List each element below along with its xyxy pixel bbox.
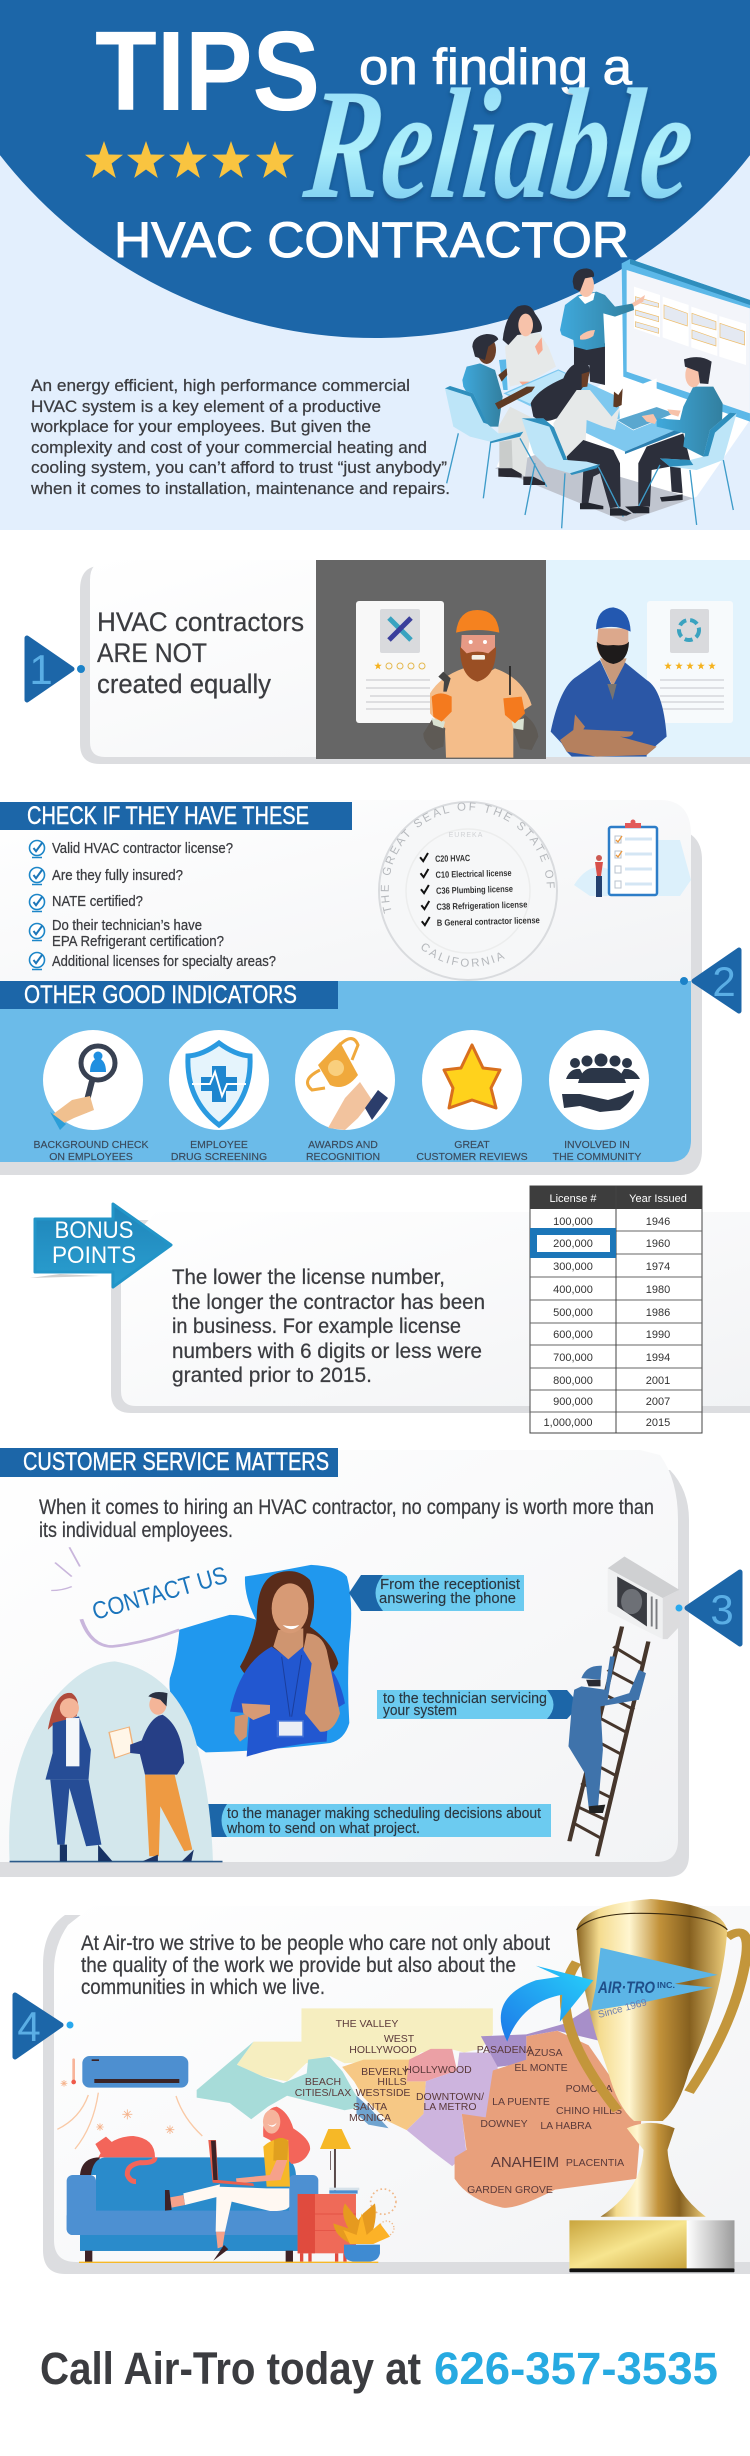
table: license number by year issued: 2007 [646,1396,670,1408]
intro paragraph: complexity and cost of your commercial heating and [31,438,427,457]
dark photo panel: poor contractor [316,560,546,759]
badge 1: 1 [29,646,53,693]
table: license number by year issued: 1974 [646,1261,670,1273]
checklist [30,840,276,970]
service area map: BEVERLY [361,2066,409,2078]
intro paragraph: workplace for your employees. But given the [30,417,371,436]
trophy with Air-Tro logo: AIR·TRO [597,1978,655,1997]
table: license number by year issued: 800,000 [553,1375,593,1387]
arrow: bonus points [30,1204,171,1287]
indicator: customer reviews: CUSTOMER REVIEWS [416,1151,528,1163]
illustration: manager and colleague [9,1661,223,1862]
table: license number by year issued: License # [549,1193,597,1205]
call to action [40,2343,718,2394]
table: license number by year issued: 300,000 [553,1261,593,1273]
panel 2: credentials and indicators [0,801,702,1175]
illustration: woman relaxing on couch under AC [57,2056,396,2262]
table: license number by year issued: 1,000,000 [544,1417,592,1429]
icon: clipboard with person [574,820,691,897]
checklist: Valid HVAC contractor license? [52,841,233,857]
heading: check if they have these: CHECK IF THEY HAVE THESE [27,802,309,830]
heading: customer service matters: CUSTOMER SERVICE MATTERS [23,1448,329,1476]
service area map: POMONA [566,2083,612,2095]
service area map: LA PUENTE [492,2096,550,2108]
service area map: WEST [384,2033,415,2045]
contact us speech graphic: CONTACT US [89,1562,230,1626]
table: license number by year issued: 1994 [646,1352,670,1364]
indicator: drug screening: EMPLOYEE [190,1139,248,1151]
heading: HVAC contractors are not created equally: created equally [97,669,271,699]
heading: HVAC contractors are not created equally: HVAC contractors [97,607,304,637]
intro paragraph: An energy efficient, high performance commercial [31,376,410,395]
community text [81,1932,550,1999]
trophy with Air-Tro logo: INC. [657,1981,675,1990]
table: license number by year issued: 1960 [646,1238,670,1250]
indicator: background check [34,1030,148,1163]
checklist: Do their technician’s have [52,918,202,934]
intro paragraph: cooling system, you can’t afford to trust “just anybody” [31,458,447,477]
panel: bonus points text [111,1212,750,1413]
title: on finding a [359,39,632,95]
intro paragraph: when it comes to installation, maintenance and repairs. [30,479,450,498]
panel 4: community and service area [43,1899,750,2274]
service area map: EL MONTE [514,2062,568,2074]
California state seal with license list: EUREKA [449,832,483,839]
California state seal with license list: C36 Plumbing license [436,884,513,896]
checklist: Additional licenses for specialty areas? [52,954,276,970]
badge 2: 2 [712,958,736,1005]
service area map: PASADENA [477,2044,533,2056]
indicator: drug screening: DRUG SCREENING [171,1151,267,1163]
service area map: HOLLYWOOD [349,2044,417,2056]
badge 4 [15,1995,74,2057]
service area map: THE VALLEY [336,2018,398,2030]
indicator: awards and recognition [295,1030,395,1163]
trophy with Air-Tro logo: Since 1969 [597,1997,649,2021]
table: license number by year issued [530,1186,702,1433]
intro text: its individual employees. [39,1519,233,1542]
service area map: CHINO HILLS [556,2105,622,2117]
service area map: DOWNEY [480,2118,528,2130]
service area map: CITIES/LAX [295,2087,351,2099]
community text: communities in which we live. [81,1976,325,1999]
indicator: involved in the community: INVOLVED IN [564,1139,630,1151]
service area map: WESTSIDE [356,2087,410,2099]
panel 1: contractors are not created equal [80,560,750,764]
hero blue dome [0,0,750,338]
badge 3: 3 [710,1586,734,1633]
service area map: HILLS [377,2076,407,2088]
California state seal with license list: B General contractor license [437,915,540,928]
service area map: LA METRO [423,2101,477,2113]
callout: manager: to the manager making scheduling decisions about [227,1805,542,1822]
call to action: Call Air-Tro today at [40,2343,421,2394]
contact us speech graphic [51,1547,230,1646]
indicator: drug screening [169,1030,269,1163]
California state seal with license list [378,801,558,981]
table: license number by year issued: 200,000 [553,1238,593,1250]
panel: bonus points text: granted prior to 2015. [172,1363,372,1387]
badge 1 [27,638,85,700]
five gold stars [85,141,294,178]
service area map [197,2006,641,2208]
table: license number by year issued: 600,000 [553,1329,593,1341]
arrow: bonus points: POINTS [52,1242,136,1269]
call to action: 626-357-3535 [434,2343,718,2394]
hero background [0,0,750,530]
table: license number by year issued: 100,000 [553,1216,593,1228]
arrow: bonus points: BONUS [54,1217,134,1244]
checklist: Are they fully insured? [52,868,183,884]
badge 3 [676,1572,740,1644]
community text: the quality of the work we provide but also about the [81,1954,516,1977]
intro text [39,1496,654,1542]
trophy with Air-Tro logo [501,1899,747,2272]
intro paragraph [30,376,450,498]
indicator: awards and recognition: RECOGNITION [306,1151,380,1163]
intro paragraph: HVAC system is a key element of a productive [31,397,381,416]
indicator: customer reviews [416,1030,528,1163]
callout: receptionist: From the receptionist [380,1576,521,1593]
illustration: team meeting at display screen [445,259,750,528]
panel: bonus points text: in business. For example license [172,1314,461,1338]
California state seal with license list: THE GREAT SEAL OF THE STATE OF [380,802,555,914]
table: license number by year issued: 2001 [646,1375,670,1387]
service area map: ANAHEIM [491,2154,559,2171]
checklist: EPA Refrigerant certification? [52,934,224,950]
table: license number by year issued: 2015 [646,1417,670,1429]
service area map: LA HABRA [540,2120,592,2132]
California state seal with license list: C38 Refrigeration license [436,899,528,912]
community text: At Air-tro we strive to be people who care not only about [81,1932,550,1955]
table: license number by year issued: Year Issued [629,1193,687,1205]
service area map: HOLLYWOOD [404,2064,472,2076]
California state seal with license list: CALIFORNIA [422,944,505,967]
intro text: When it comes to hiring an HVAC contractor, no company is worth more than [39,1496,654,1519]
table: license number by year issued: 1990 [646,1329,670,1341]
checklist: NATE certified? [52,894,143,910]
table: license number by year issued: 900,000 [553,1396,593,1408]
panel 3: customer service matters [0,1448,689,1877]
service area map: PLACENTIA [566,2157,624,2169]
table: license number by year issued: 500,000 [553,1307,593,1319]
table: license number by year issued: 400,000 [553,1284,593,1296]
receptionist photo on blue shape [169,1565,351,1757]
title: HVAC CONTRACTOR [114,212,629,268]
table: license number by year issued: 1980 [646,1284,670,1296]
service area map: GARDEN GROVE [467,2184,553,2196]
indicator: involved in the community [549,1030,649,1163]
California state seal with license list: C20 HVAC [435,853,471,864]
badge 2 [680,950,739,1011]
panel: bonus points text: The lower the license number, [172,1265,445,1289]
light photo panel: good contractor [546,560,750,757]
badge 4: 4 [17,2003,41,2050]
indicator: background check: BACKGROUND CHECK [34,1139,148,1151]
title [95,8,702,268]
title: TIPS [95,8,320,134]
indicator: customer reviews: GREAT [454,1139,490,1151]
service area map: MONICA [349,2112,391,2124]
callout: technician: your system [383,1702,457,1719]
callout: receptionist [349,1575,524,1611]
panel: bonus points text: numbers with 6 digits or less were [172,1339,482,1363]
indicator: involved in the community: THE COMMUNITY [553,1151,641,1163]
illustration: outdoor AC unit and ladder technician [568,1557,679,1856]
heading: other good indicators: OTHER GOOD INDICATORS [24,981,297,1009]
service area map: DOWNTOWN/ [416,2091,484,2103]
heading: HVAC contractors are not created equally: ARE NOT [97,638,207,668]
callout: technician: to the technician servicing [383,1690,547,1707]
service area map: BEACH [305,2076,341,2088]
callout: receptionist: answering the phone [379,1590,516,1607]
service area map: AZUSA [527,2047,563,2059]
table: license number by year issued: 1986 [646,1307,670,1319]
callout: manager [194,1804,551,1837]
callout: manager: whom to send on what project. [226,1820,420,1837]
panel: bonus points text: the longer the contractor has been [172,1290,485,1314]
California state seal with license list: C10 Electrical license [435,868,512,880]
indicator: background check: ON EMPLOYEES [49,1151,133,1163]
indicator: awards and recognition: AWARDS AND [308,1139,378,1151]
callout: technician [377,1690,580,1719]
table: license number by year issued: 1946 [646,1216,670,1228]
table: license number by year issued: 700,000 [553,1352,593,1364]
service area map: SANTA [353,2101,387,2113]
heading: HVAC contractors are not created equally [97,607,304,699]
